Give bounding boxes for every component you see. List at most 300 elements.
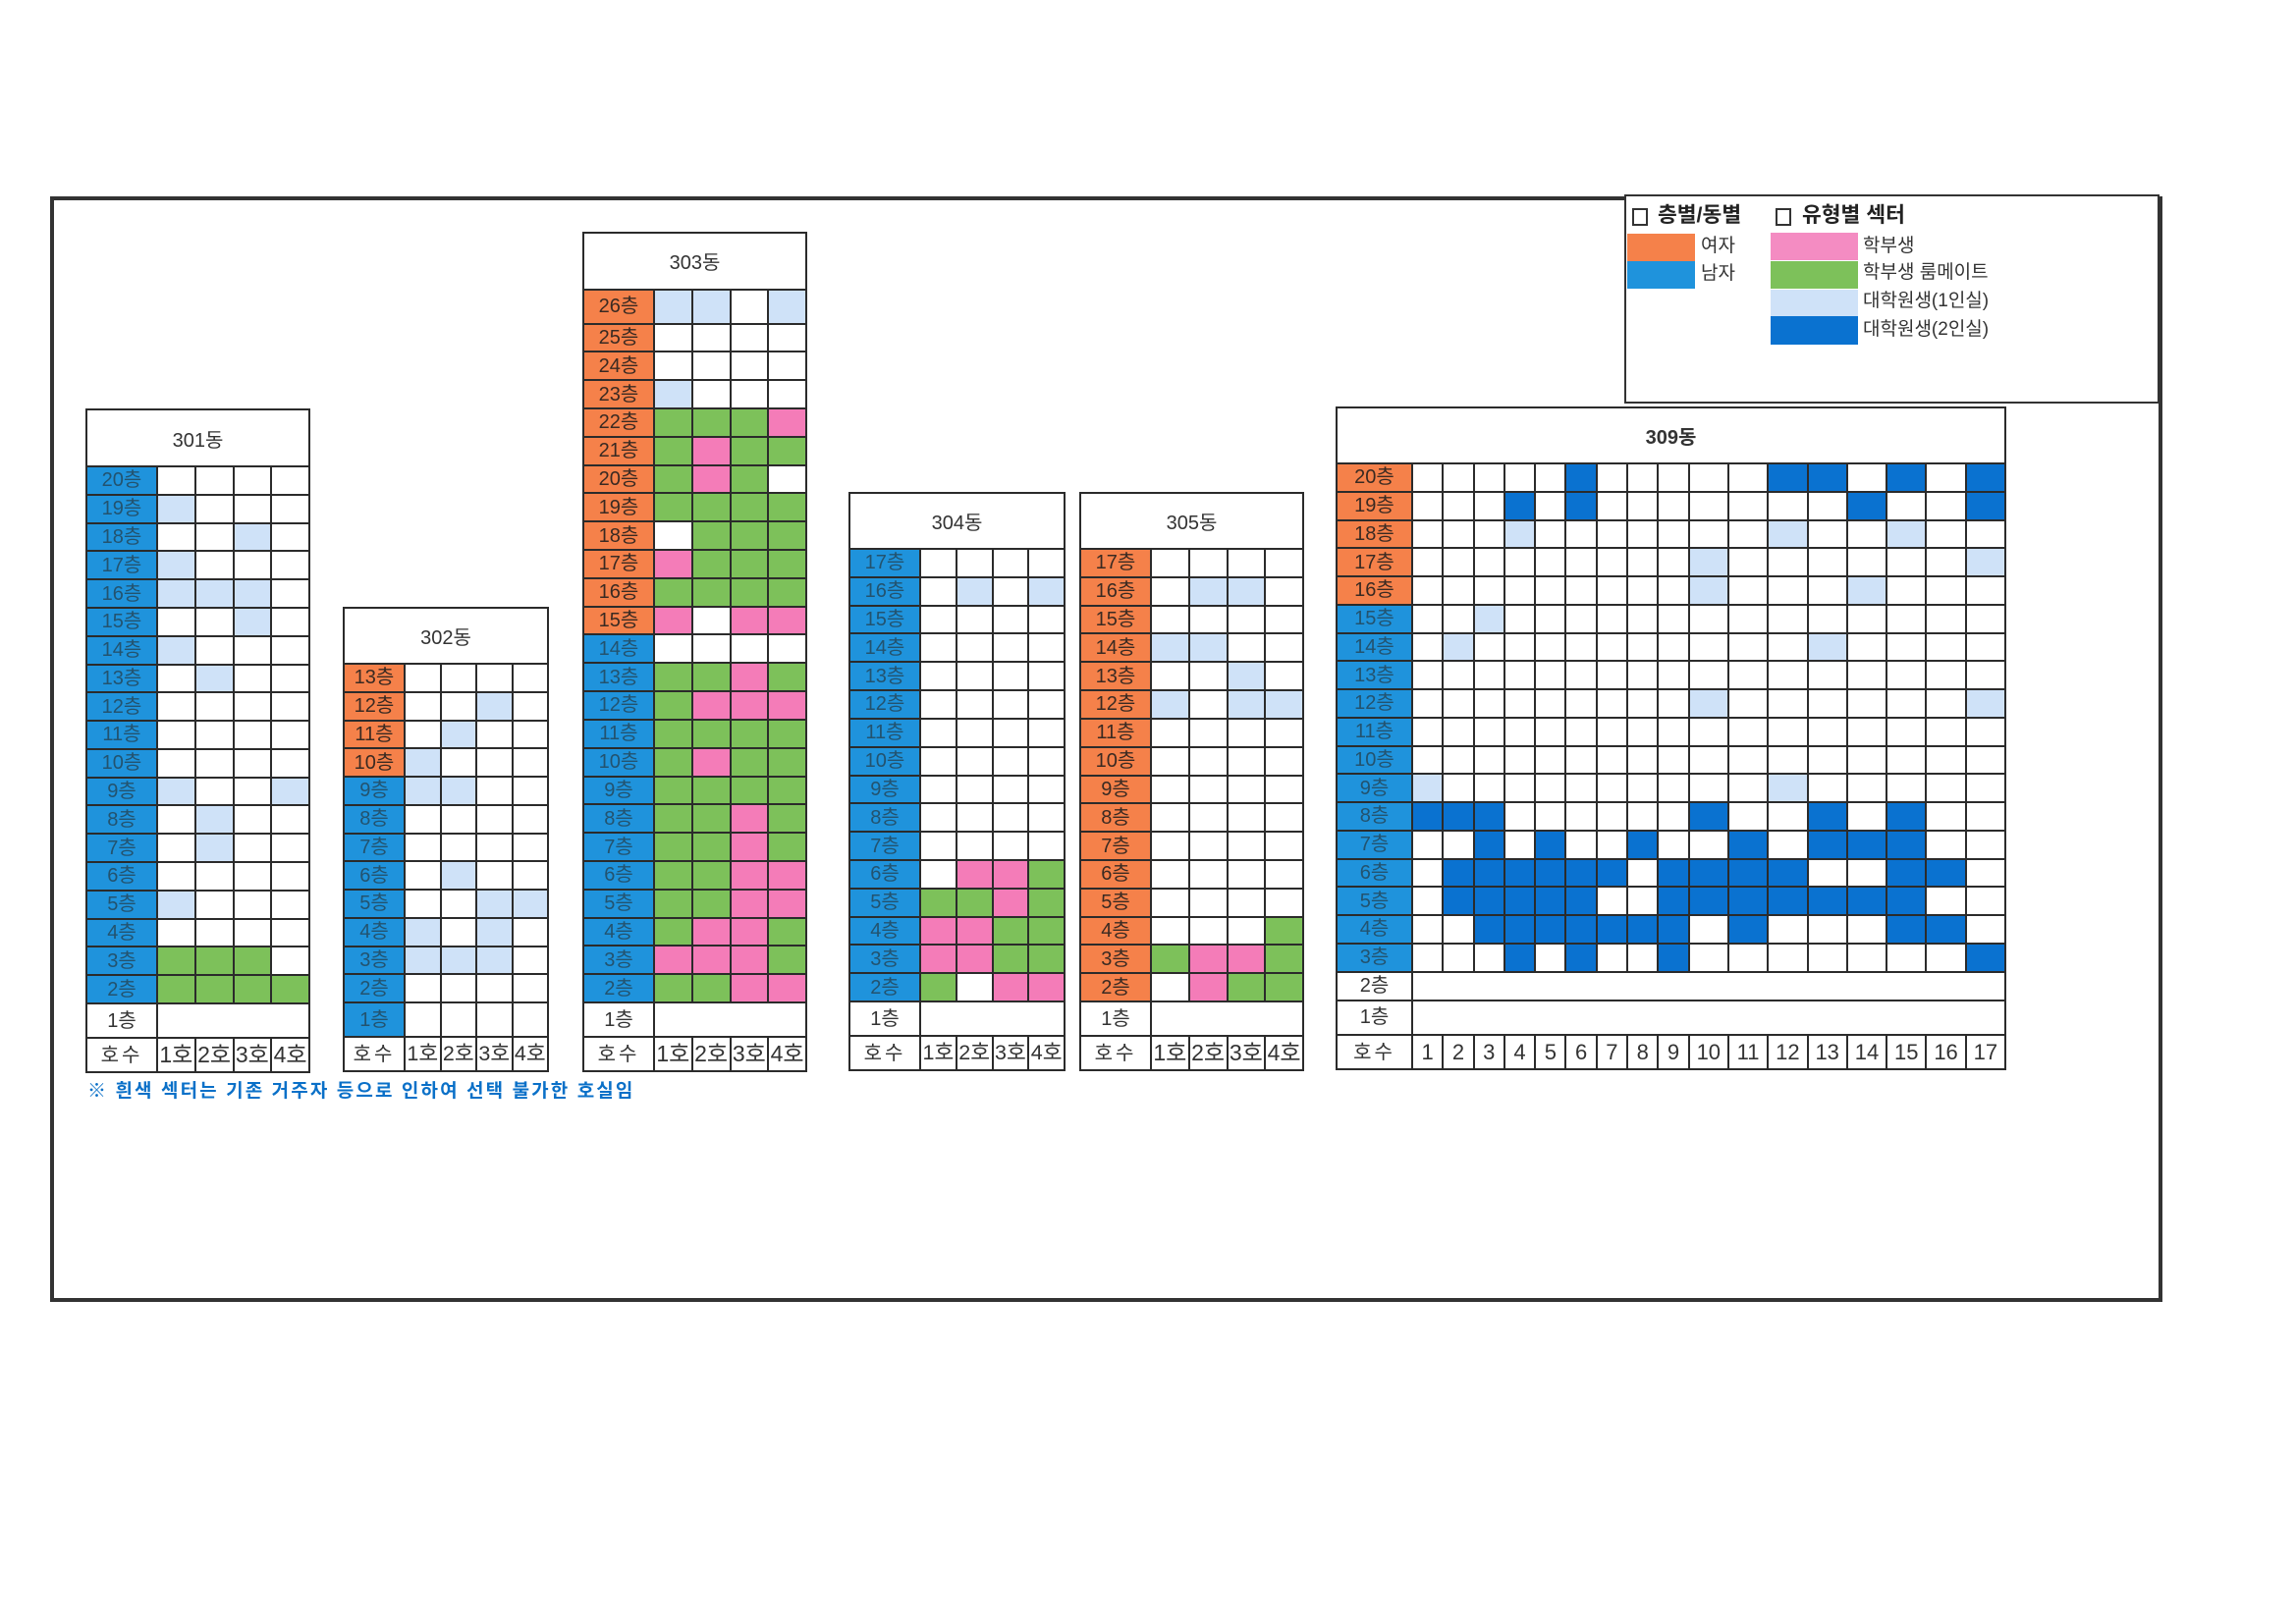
row: room numbers: 3호 <box>995 1041 1026 1064</box>
row: room numbers <box>87 1039 308 1071</box>
legend heading: floor/building: 층별/동별 <box>1658 203 1741 227</box>
row: 13층 <box>584 664 805 690</box>
row: 9층: 9층 <box>604 780 633 801</box>
row: 17층 <box>87 552 308 578</box>
row: 4층 <box>1081 918 1302 944</box>
row: 11층 <box>1338 719 2004 744</box>
row: 1층: 1층 <box>107 1009 137 1031</box>
row: 1층 <box>850 1002 1064 1035</box>
row: 13층: 13층 <box>355 667 394 688</box>
row: 15층 <box>850 607 1064 632</box>
row: 5층: 5층 <box>107 893 137 915</box>
row: 15층 <box>1081 607 1302 632</box>
row: 15층: 15층 <box>1354 608 1394 629</box>
row: 17층: 17층 <box>102 555 141 576</box>
row: 11층 <box>850 720 1064 746</box>
row: 17층 <box>1338 549 2004 575</box>
panel: building 301 <box>85 408 310 1073</box>
row: 1층 <box>1338 1001 2004 1034</box>
row: 12층: 12층 <box>599 694 638 716</box>
row: 14층: 14층 <box>1096 637 1135 659</box>
heading: 301동 <box>87 410 308 465</box>
row: room numbers: 1호 <box>656 1041 689 1066</box>
row: 24층: 24층 <box>599 355 638 377</box>
row: 15층 <box>584 608 805 633</box>
row: 16층 <box>1081 578 1302 605</box>
legend checkbox: floor/building <box>1632 208 1648 226</box>
row: 1층 <box>1081 1002 1302 1035</box>
row: 3층 <box>1081 946 1302 972</box>
row: 19층: 19층 <box>599 497 638 518</box>
row: 5층: 5층 <box>1360 891 1389 912</box>
row: 1층: 1층 <box>604 1009 633 1031</box>
row: 12층 <box>345 693 547 720</box>
row: room numbers: 4 <box>1513 1039 1526 1064</box>
row: 1층 <box>87 1004 308 1037</box>
row: room numbers: 4호 <box>771 1041 804 1066</box>
row: room numbers <box>850 1037 1064 1069</box>
row: 4층 <box>87 920 308 946</box>
row: 2층 <box>87 976 308 1002</box>
row: 12층 <box>1081 691 1302 718</box>
row: 13층: 13층 <box>865 666 904 687</box>
row: 14층: 14층 <box>1354 636 1394 658</box>
row: 6층: 6층 <box>359 865 389 887</box>
row: 8층: 8층 <box>107 809 137 831</box>
row: 9층: 9층 <box>359 780 389 801</box>
row: 1층 <box>584 1003 805 1036</box>
heading: 309동: 309동 <box>1646 427 1696 449</box>
row: 4층: 4층 <box>359 921 389 943</box>
row: 8층 <box>345 806 547 833</box>
row: 16층: 16층 <box>102 583 141 605</box>
row: 10층: 10층 <box>865 750 904 772</box>
row: 3층: 3층 <box>107 950 137 972</box>
row: 7층: 7층 <box>604 837 633 858</box>
row: 12층 <box>1338 690 2004 717</box>
row: 11층: 11층 <box>1096 722 1135 743</box>
row: 6층: 6층 <box>107 865 137 887</box>
swatch: graduate single <box>1771 290 1858 316</box>
row: room numbers: 6 <box>1575 1039 1587 1064</box>
row: 15층 <box>87 609 308 635</box>
row: 11층 <box>584 721 805 747</box>
row: room numbers: 16 <box>1934 1039 1958 1064</box>
heading: 302동 <box>345 609 547 663</box>
row: room numbers: 3 <box>1483 1039 1495 1064</box>
legend checkbox: type <box>1776 208 1791 226</box>
row: 3층: 3층 <box>870 948 900 970</box>
row: 10층 <box>850 748 1064 774</box>
row: 2층 <box>345 975 547 1001</box>
row: 17층: 17층 <box>1096 552 1135 573</box>
row: room numbers: 2호 <box>694 1041 728 1066</box>
row: 25층 <box>584 325 805 351</box>
row: 11층: 11층 <box>1355 721 1394 742</box>
row: 8층: 8층 <box>1360 805 1389 827</box>
row: 7층 <box>87 835 308 861</box>
row: 4층 <box>345 919 547 946</box>
row: 9층 <box>1338 775 2004 801</box>
row: room numbers <box>584 1038 805 1070</box>
heading: 305동: 305동 <box>1167 513 1217 534</box>
row: 4층: 4층 <box>604 921 633 943</box>
row: 5층 <box>87 892 308 918</box>
row: room numbers: 10 <box>1697 1039 1721 1064</box>
row: 4층 <box>850 918 1064 944</box>
row: 13층 <box>1338 662 2004 688</box>
row: room numbers: 3호 <box>478 1042 510 1065</box>
row: 22층 <box>584 409 805 436</box>
row: 13층: 13층 <box>102 668 141 689</box>
row: 8층 <box>1081 804 1302 831</box>
row: 11층 <box>345 722 547 747</box>
row: 16층 <box>584 579 805 606</box>
row: 26층 <box>584 291 805 323</box>
row: 1층 <box>345 1003 547 1036</box>
row: room numbers: 8 <box>1637 1039 1649 1064</box>
row: 20층 <box>584 466 805 492</box>
row: room numbers: 3호 <box>1230 1040 1263 1065</box>
row: 6층 <box>87 863 308 890</box>
row: room numbers: 호수 <box>354 1043 395 1064</box>
row: 14층 <box>87 637 308 664</box>
row: 2층: 2층 <box>870 977 900 999</box>
row: room numbers: 3호 <box>236 1042 269 1067</box>
row: room numbers: 호수 <box>864 1043 905 1064</box>
row: 16층 <box>850 578 1064 605</box>
footnote: ※ 흰색 섹터는 기존 거주자 등으로 인하여 선택 불가한 호실임 <box>87 1081 634 1102</box>
row: 9층: 9층 <box>1360 778 1389 799</box>
row: 10층 <box>1081 748 1302 774</box>
row: 2층: 2층 <box>1101 977 1130 999</box>
row: 5층: 5층 <box>359 893 389 914</box>
row: 25층: 25층 <box>599 327 638 349</box>
row: 7층: 7층 <box>107 838 137 859</box>
row: 1층: 1층 <box>870 1007 900 1029</box>
row: 18층 <box>1338 520 2004 547</box>
row: 9층: 9층 <box>107 781 137 802</box>
row: 6층 <box>345 862 547 889</box>
swatch: female <box>1627 234 1695 261</box>
row: 13층: 13층 <box>599 667 638 688</box>
row: 24층 <box>584 352 805 379</box>
row: 9층 <box>87 779 308 804</box>
row: 19층 <box>584 494 805 520</box>
row: 8층: 8층 <box>604 808 633 830</box>
row: 17층 <box>584 551 805 577</box>
row: 11층 <box>1081 720 1302 746</box>
row: 11층: 11층 <box>599 723 638 744</box>
row: room numbers <box>345 1038 547 1070</box>
row: 5층: 5층 <box>604 893 633 914</box>
heading: 305동 <box>1081 494 1302 548</box>
row: 18층: 18층 <box>102 526 141 548</box>
row: 15층: 15층 <box>102 611 141 632</box>
heading: 302동: 302동 <box>420 627 471 649</box>
row: 12층 <box>584 692 805 719</box>
row: 10층 <box>87 750 308 777</box>
row: 7층 <box>850 833 1064 859</box>
row: 14층 <box>1081 634 1302 661</box>
row: 5층 <box>584 891 805 917</box>
row: 6층: 6층 <box>870 863 900 885</box>
row: 3층 <box>850 946 1064 972</box>
row: 13층 <box>345 665 547 691</box>
row: room numbers: 호수 <box>1353 1041 1395 1062</box>
row: 20층 <box>1338 464 2004 491</box>
row: 3층 <box>345 947 547 973</box>
row: room numbers: 11 <box>1737 1039 1760 1064</box>
row: 12층 <box>87 693 308 720</box>
row: 8층: 8층 <box>870 807 900 829</box>
row: 5층 <box>1081 890 1302 916</box>
row: 7층 <box>345 835 547 860</box>
row: 2층: 2층 <box>604 978 633 1000</box>
row: 10층 <box>584 749 805 776</box>
legend heading: sector type: 유형별 섹터 <box>1802 203 1905 227</box>
row: 6층 <box>584 862 805 889</box>
row: 9층: 9층 <box>870 779 900 800</box>
panel: building 305 <box>1079 492 1304 1071</box>
row: 2층 <box>850 974 1064 1001</box>
panel: building 309 <box>1336 406 2006 1070</box>
panel: building 303 <box>582 232 807 1072</box>
row: room numbers: 4호 <box>274 1042 307 1067</box>
label: female: 여자 <box>1701 236 1735 256</box>
row: 11층 <box>87 722 308 748</box>
legend panel <box>1624 194 2159 404</box>
row: 21층 <box>584 438 805 464</box>
row: 14층 <box>850 634 1064 661</box>
row: room numbers: 1호 <box>923 1041 954 1064</box>
row: 14층 <box>1338 634 2004 660</box>
row: room numbers: 호수 <box>1095 1043 1136 1064</box>
row: 7층: 7층 <box>1101 836 1130 857</box>
row: room numbers: 2호 <box>958 1041 990 1064</box>
heading: 301동: 301동 <box>173 430 223 452</box>
row: 11층: 11층 <box>102 724 141 745</box>
row: 12층: 12층 <box>102 696 141 718</box>
row: 2층: 2층 <box>359 978 389 1000</box>
row: 6층: 6층 <box>604 864 633 886</box>
row: 6층 <box>850 861 1064 888</box>
swatch: undergraduate <box>1771 233 1858 260</box>
row: 12층 <box>850 691 1064 718</box>
row: 16층 <box>1338 577 2004 604</box>
row: room numbers: 4호 <box>1268 1040 1301 1065</box>
row: 9층 <box>850 776 1064 802</box>
row: 15층: 15층 <box>599 610 638 631</box>
row: 14층: 14층 <box>865 637 904 659</box>
row: 20층: 20층 <box>1354 466 1394 488</box>
swatch: male <box>1627 261 1695 289</box>
row: 17층: 17층 <box>865 552 904 573</box>
row: room numbers <box>1081 1037 1302 1069</box>
row: room numbers: 7 <box>1606 1039 1618 1064</box>
row: 7층 <box>584 834 805 860</box>
row: 15층: 15층 <box>1096 609 1135 630</box>
row: 26층: 26층 <box>599 296 638 317</box>
row: 21층: 21층 <box>599 440 638 461</box>
row: room numbers: 1호 <box>159 1042 192 1067</box>
row: 1층: 1층 <box>1101 1007 1130 1029</box>
row: 4층: 4층 <box>1101 920 1130 942</box>
row: 13층: 13층 <box>1096 666 1135 687</box>
row: room numbers: 17 <box>1974 1039 1997 1064</box>
row: 20층: 20층 <box>599 468 638 490</box>
row: 1층: 1층 <box>1360 1006 1389 1028</box>
row: room numbers: 1호 <box>1153 1040 1186 1065</box>
row: 15층: 15층 <box>865 609 904 630</box>
label: male: 남자 <box>1701 263 1735 284</box>
row: 14층: 14층 <box>599 638 638 660</box>
row: 16층: 16층 <box>1354 579 1394 601</box>
row: 18층 <box>87 524 308 550</box>
row: 8층 <box>584 805 805 832</box>
row: 5층 <box>1338 888 2004 914</box>
row: 12층: 12층 <box>1354 692 1394 714</box>
label: undergraduate: 학부생 <box>1863 236 1914 256</box>
row: 6층 <box>1081 861 1302 888</box>
row: 7층 <box>1338 832 2004 858</box>
row: 19층: 19층 <box>1354 495 1394 516</box>
row: room numbers: 12 <box>1776 1039 1800 1064</box>
row: room numbers: 1 <box>1422 1039 1434 1064</box>
row: 3층 <box>584 947 805 973</box>
heading: 304동: 304동 <box>932 513 982 534</box>
row: 23층: 23층 <box>599 384 638 406</box>
row: room numbers: 4호 <box>1031 1041 1063 1064</box>
row: room numbers: 15 <box>1894 1039 1919 1064</box>
row: 20층: 20층 <box>102 469 141 491</box>
row: 12층: 12층 <box>865 693 904 715</box>
row: 7층 <box>1081 833 1302 859</box>
swatch: graduate double <box>1771 316 1858 345</box>
row: 11층: 11층 <box>355 724 394 745</box>
row: 10층: 10층 <box>599 751 638 773</box>
row: 7층: 7층 <box>870 836 900 857</box>
row: 10층: 10층 <box>102 752 141 774</box>
row: 18층: 18층 <box>1354 523 1394 545</box>
row: 5층 <box>850 890 1064 916</box>
row: 19층 <box>87 496 308 522</box>
row: 19층 <box>1338 493 2004 518</box>
row: 11층: 11층 <box>865 722 904 743</box>
row: room numbers: 9 <box>1667 1039 1679 1064</box>
row: 18층 <box>584 522 805 549</box>
heading: 309동 <box>1338 408 2004 462</box>
row: 7층: 7층 <box>1360 834 1389 855</box>
row: room numbers: 5 <box>1545 1039 1557 1064</box>
row: 7층: 7층 <box>359 837 389 858</box>
row: 16층: 16층 <box>865 580 904 602</box>
row: 9층 <box>345 778 547 804</box>
row: room numbers: 3호 <box>733 1041 766 1066</box>
row: 16층 <box>87 580 308 607</box>
label: graduate single: 대학원생(1인실) <box>1863 291 1989 311</box>
row: 20층 <box>87 467 308 494</box>
row: 14층 <box>584 635 805 662</box>
row: 4층: 4층 <box>1360 918 1389 940</box>
panel: building 302 <box>343 607 549 1072</box>
row: 15층 <box>1338 606 2004 632</box>
row: 10층 <box>1338 746 2004 773</box>
row: 19층: 19층 <box>102 498 141 519</box>
row: 2층: 2층 <box>107 979 137 1001</box>
row: 12층: 12층 <box>1096 693 1135 715</box>
row: 4층 <box>1338 916 2004 943</box>
row: 23층 <box>584 381 805 407</box>
row: room numbers: 2호 <box>1191 1040 1225 1065</box>
row: 6층: 6층 <box>1360 862 1389 884</box>
row: 13층: 13층 <box>1354 665 1394 686</box>
row: 6층: 6층 <box>1101 863 1130 885</box>
row: 3층 <box>1338 945 2004 970</box>
row: 3층: 3층 <box>1101 948 1130 970</box>
row: 2층 <box>584 975 805 1001</box>
row: 3층: 3층 <box>1360 947 1389 968</box>
row: 3층: 3층 <box>604 949 633 971</box>
row: room numbers: 호수 <box>598 1043 639 1064</box>
row: room numbers <box>1338 1036 2004 1068</box>
row: 22층: 22층 <box>599 411 638 433</box>
row: 14층: 14층 <box>102 639 141 661</box>
row: 8층 <box>87 806 308 833</box>
row: 13층 <box>1081 663 1302 689</box>
row: 16층: 16층 <box>1096 580 1135 602</box>
row: room numbers: 2 <box>1452 1039 1464 1064</box>
row: room numbers: 1호 <box>407 1042 438 1065</box>
heading: 303동: 303동 <box>670 252 720 274</box>
row: 9층 <box>1081 776 1302 802</box>
row: 13층 <box>850 663 1064 689</box>
row: room numbers: 호수 <box>101 1045 142 1066</box>
row: 17층: 17층 <box>1354 552 1394 573</box>
row: 9층: 9층 <box>1101 779 1130 800</box>
row: 8층: 8층 <box>1101 807 1130 829</box>
row: 10층 <box>345 749 547 776</box>
row: room numbers: 2호 <box>197 1042 231 1067</box>
outer frame <box>50 196 2162 1302</box>
swatch: undergraduate roommate <box>1771 261 1858 289</box>
row: 8층 <box>1338 803 2004 830</box>
row: 10층: 10층 <box>355 752 394 774</box>
row: room numbers: 13 <box>1815 1039 1839 1064</box>
row: 6층 <box>1338 860 2004 886</box>
row: 10층: 10층 <box>1354 749 1394 771</box>
row: 5층: 5층 <box>870 892 900 913</box>
row: 2층: 2층 <box>1360 975 1389 997</box>
row: 10층: 10층 <box>1096 750 1135 772</box>
row: 8층 <box>850 804 1064 831</box>
row: 2층 <box>1081 974 1302 1001</box>
row: 3층 <box>87 947 308 974</box>
row: 4층 <box>584 919 805 945</box>
row: 4층: 4층 <box>870 920 900 942</box>
label: undergraduate roommate: 학부생 룸메이트 <box>1863 262 1989 283</box>
row: room numbers: 14 <box>1855 1039 1879 1064</box>
row: 5층: 5층 <box>1101 892 1130 913</box>
row: 3층: 3층 <box>359 949 389 971</box>
row: 16층: 16층 <box>599 581 638 603</box>
heading: 304동 <box>850 494 1064 548</box>
label: graduate double: 대학원생(2인실) <box>1863 319 1989 340</box>
row: 2층 <box>1338 972 2004 1000</box>
row: 8층: 8층 <box>359 808 389 830</box>
row: 17층 <box>1081 550 1302 576</box>
row: 1층: 1층 <box>359 1009 389 1031</box>
